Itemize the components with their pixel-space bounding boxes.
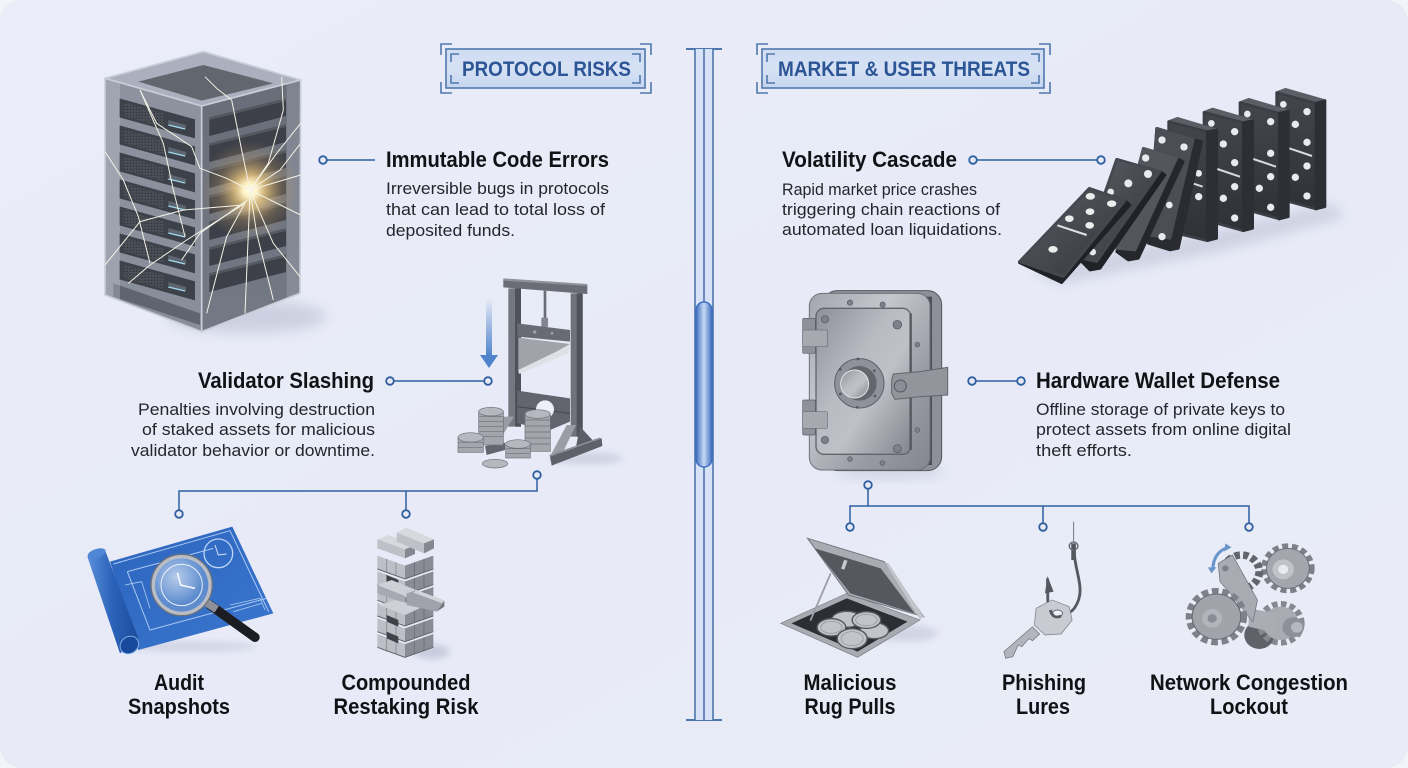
text block: volatility cascade: Rapid market price crashes xyxy=(782,180,977,199)
text block: hardware wallet defense: Hardware Wallet Defense xyxy=(1036,368,1280,393)
text block: volatility cascade: automated loan liquidations. xyxy=(782,220,1002,239)
label: malicious rug pulls: Malicious xyxy=(804,670,896,695)
label: malicious rug pulls: Rug Pulls xyxy=(804,694,896,719)
icon: key on fishing hook xyxy=(1004,522,1080,658)
label: compounded restaking risk: Compounded xyxy=(342,670,470,695)
connector: volatility cascade xyxy=(969,156,1105,164)
icon: guillotine with coins xyxy=(458,278,623,468)
label: audit snapshots: Snapshots xyxy=(128,694,230,719)
text block: validator slashing: of staked assets for malicious xyxy=(142,420,375,439)
connector: immutable code errors xyxy=(319,156,375,164)
icon: cracked server rack xyxy=(105,52,327,333)
text block: volatility cascade: Volatility Cascade xyxy=(782,147,957,172)
label: network congestion lockout xyxy=(1150,670,1348,719)
label: phishing lures: Lures xyxy=(1016,694,1070,719)
icon: jenga tower xyxy=(377,528,450,659)
label: network congestion lockout: Network Congestion xyxy=(1150,670,1348,695)
text block: volatility cascade xyxy=(782,147,1002,239)
label: phishing lures: Phishing xyxy=(1002,670,1086,695)
text block: validator slashing xyxy=(131,368,375,460)
connector: hardware wallet defense xyxy=(968,377,1025,385)
text block: hardware wallet defense: theft efforts. xyxy=(1036,441,1132,460)
icon: interlocking gears xyxy=(1190,543,1311,649)
label: compounded restaking risk xyxy=(334,670,479,719)
text block: hardware wallet defense xyxy=(1036,368,1291,460)
label: phishing lures xyxy=(1002,670,1086,719)
text block: immutable code errors: Irreversible bugs in protocols xyxy=(386,179,609,198)
text block: hardware wallet defense: Offline storage of private keys to xyxy=(1036,400,1285,419)
label: audit snapshots xyxy=(128,670,230,719)
heading badge: protocol risks xyxy=(441,44,651,93)
text block: immutable code errors xyxy=(386,147,609,240)
text block: validator slashing: Penalties involving destruction xyxy=(138,400,375,419)
icon: falling dominoes xyxy=(1019,89,1347,283)
icon: blueprint and magnifier xyxy=(86,527,273,657)
label: network congestion lockout: Lockout xyxy=(1210,694,1289,719)
connector tree: protocol risks xyxy=(175,471,541,518)
connector: validator slashing xyxy=(386,377,492,385)
heading: market and user threats: MARKET & USER THREATS xyxy=(778,58,1030,81)
text block: immutable code errors: Immutable Code Errors xyxy=(386,147,609,172)
text block: validator slashing: validator behavior or downtime. xyxy=(131,441,375,460)
text block: validator slashing: Validator Slashing xyxy=(198,368,374,393)
label: malicious rug pulls xyxy=(804,670,896,719)
icon: hardware wallet vault xyxy=(803,291,948,478)
label: audit snapshots: Audit xyxy=(154,670,205,695)
text block: immutable code errors: deposited funds. xyxy=(386,221,515,240)
central divider xyxy=(686,49,722,720)
text block: volatility cascade: triggering chain reactions of xyxy=(782,200,1000,219)
text block: immutable code errors: that can lead to total loss of xyxy=(386,200,605,219)
label: compounded restaking risk: Restaking Risk xyxy=(334,694,479,719)
icon: down arrow xyxy=(480,298,498,368)
connector tree: market and user threats xyxy=(846,481,1253,531)
heading badge: market and user threats xyxy=(757,44,1050,93)
text block: hardware wallet defense: protect assets from online digital xyxy=(1036,420,1291,439)
heading: protocol risks: PROTOCOL RISKS xyxy=(462,58,631,81)
icon: open rug pull box xyxy=(781,538,938,657)
